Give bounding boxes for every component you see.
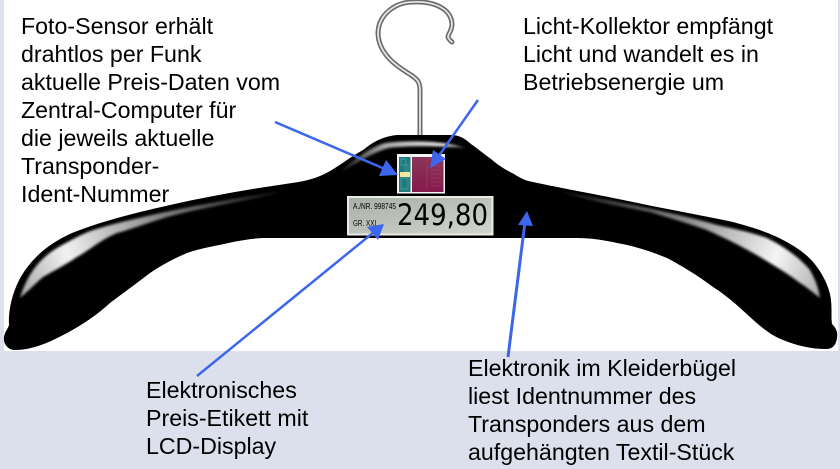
text: photo sensor description: Ident-Nummer — [21, 181, 169, 207]
text: electronics description: aufgehängten Textil-Stück — [468, 439, 735, 465]
highlight: right arm — [558, 191, 820, 298]
text: electronics description: Elektronik im Kleiderbügel — [468, 355, 736, 381]
arrow: to electronics — [508, 211, 533, 357]
text: price label description: Preis-Etikett mit — [146, 405, 309, 431]
text: photo sensor description: Zentral-Computer für — [21, 97, 236, 123]
text: photo sensor description: die jeweils aktuelle — [21, 125, 214, 151]
photo sensor — [399, 157, 410, 192]
text: price label description: LCD-Display — [146, 433, 277, 459]
photo sensor and light collector module — [397, 154, 445, 194]
LCD price display — [347, 196, 494, 236]
text: photo sensor description: aktuelle Preis-Daten vom — [21, 69, 280, 95]
text: price label description: Elektronisches — [146, 377, 297, 403]
light collector — [412, 157, 444, 192]
LCD price display: 249,80 — [397, 198, 488, 232]
text: light collector description: Licht-Kollektor empfängt — [523, 13, 774, 39]
text: electronics description: liest Identnummer des — [468, 383, 696, 409]
LCD price display: A./NR. 998745 — [353, 202, 396, 211]
text: electronics description: Transponders aus dem — [468, 411, 706, 437]
text: photo sensor description: Transponder- — [21, 153, 159, 179]
arrow: to photo sensor — [275, 122, 398, 176]
icon: metal hook — [378, 2, 452, 138]
text: light collector description: Betriebsenergie um — [523, 69, 724, 95]
white background panel — [4, 0, 838, 351]
highlight: shoulder — [341, 141, 466, 172]
text: photo sensor description: Foto-Sensor erhält — [21, 13, 214, 39]
arrow: to light collector — [430, 100, 478, 168]
arrow: to LCD display — [197, 224, 384, 376]
text: photo sensor description: drahtlos per Funk — [21, 41, 202, 67]
highlight: left arm — [20, 191, 286, 298]
LCD price display: GR. XXL — [353, 219, 378, 228]
hanger body — [4, 135, 837, 350]
hanger illustration — [4, 2, 837, 350]
text: light collector description: Licht und wandelt es in — [523, 41, 759, 67]
